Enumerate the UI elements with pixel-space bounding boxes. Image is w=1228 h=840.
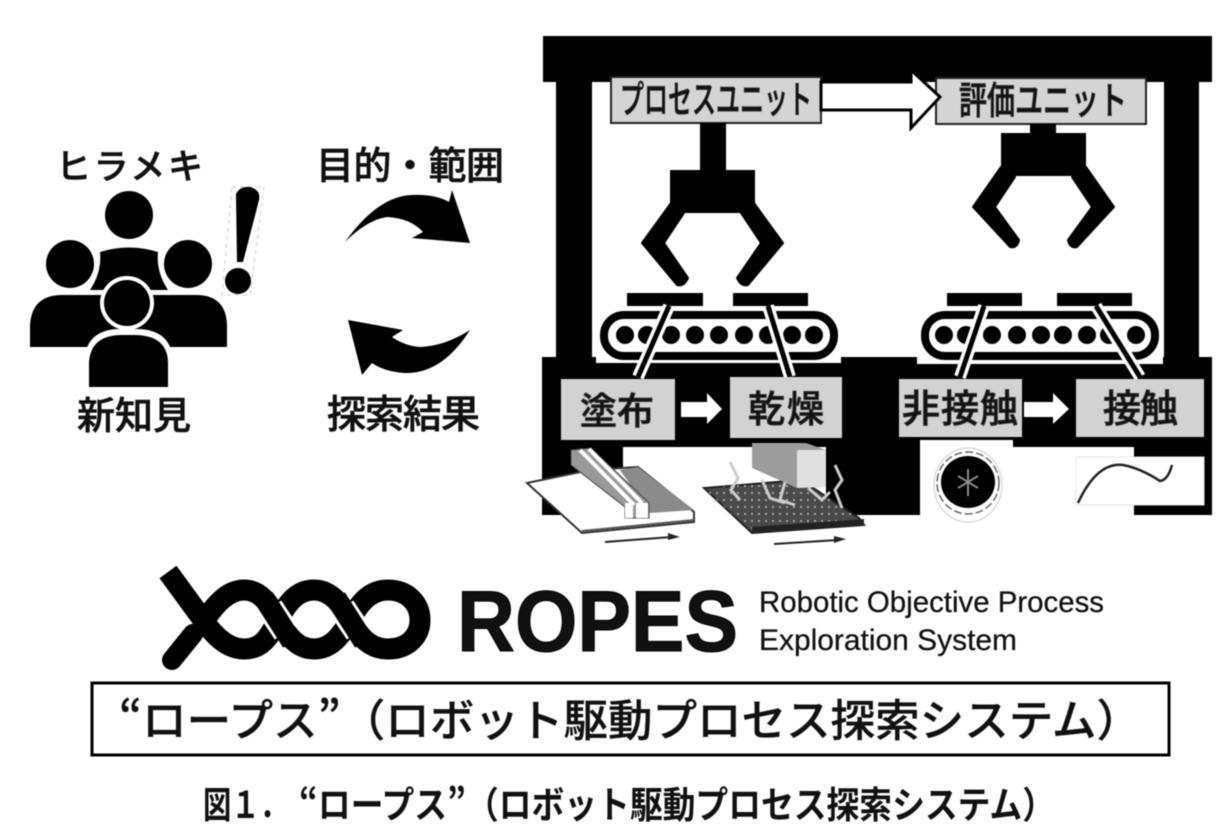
panel: exploration cycle <box>316 146 504 437</box>
connector lines <box>638 306 1140 377</box>
unit box: process: プロセスユニット <box>620 80 812 122</box>
label: drying <box>730 377 842 438</box>
arrow: clockwise bottom <box>348 320 470 375</box>
label: drying: 乾燥 <box>748 389 824 430</box>
arrow: process to evaluation <box>821 70 940 128</box>
label: contact: 接触 <box>1103 389 1178 431</box>
conveyor: process <box>596 293 841 363</box>
heading: hirameki: ヒラメキ <box>56 148 203 187</box>
illustration: drying head on substrate <box>704 443 864 544</box>
unit box: evaluation <box>936 78 1146 124</box>
illustration: droplet image <box>920 440 1013 530</box>
frame: top beam and columns <box>542 36 1212 515</box>
icon: rope knot <box>168 572 420 660</box>
title box: “ロープス”（ロボット駆動プロセス探索システム） <box>119 685 1141 749</box>
label: non-contact <box>899 379 1022 437</box>
icon: group of people <box>30 191 227 392</box>
icon: exclamation mark <box>222 187 264 295</box>
caption: “ロープス”（ロボット駆動プロセス探索システム） <box>299 775 1055 829</box>
conveyor: evaluation <box>917 293 1163 364</box>
label: new findings: 新知見 <box>77 396 191 438</box>
unit box: evaluation: 評価ユニット <box>959 81 1127 123</box>
unit box: process <box>611 77 821 123</box>
label: contact <box>1076 379 1204 437</box>
robot gripper: process <box>642 123 783 285</box>
tagline line 1: Robotic Objective Process <box>759 586 1104 619</box>
label: purpose and scope: 目的・範囲 <box>316 146 504 188</box>
label: coating <box>561 379 675 440</box>
label: search results: 探索結果 <box>327 394 480 437</box>
robot gripper: evaluation <box>973 124 1114 247</box>
arrow: clockwise top <box>345 190 470 243</box>
label: non-contact: 非接触 <box>902 389 1018 431</box>
tagline line 2: Exploration System <box>759 624 1017 657</box>
arrow: non-contact to contact <box>1024 393 1069 424</box>
illustration: coating head on substrate <box>527 448 694 542</box>
wordmark: ROPES <box>457 574 738 670</box>
panel: insight group <box>30 148 264 438</box>
logo: ROPES <box>168 572 1104 670</box>
panel: robot frame <box>527 36 1212 544</box>
label: coating: 塗布 <box>580 391 654 432</box>
chart: contact measurement curve <box>1076 457 1204 505</box>
caption: 図１． <box>203 775 288 829</box>
arrow: coating to drying <box>681 393 722 424</box>
